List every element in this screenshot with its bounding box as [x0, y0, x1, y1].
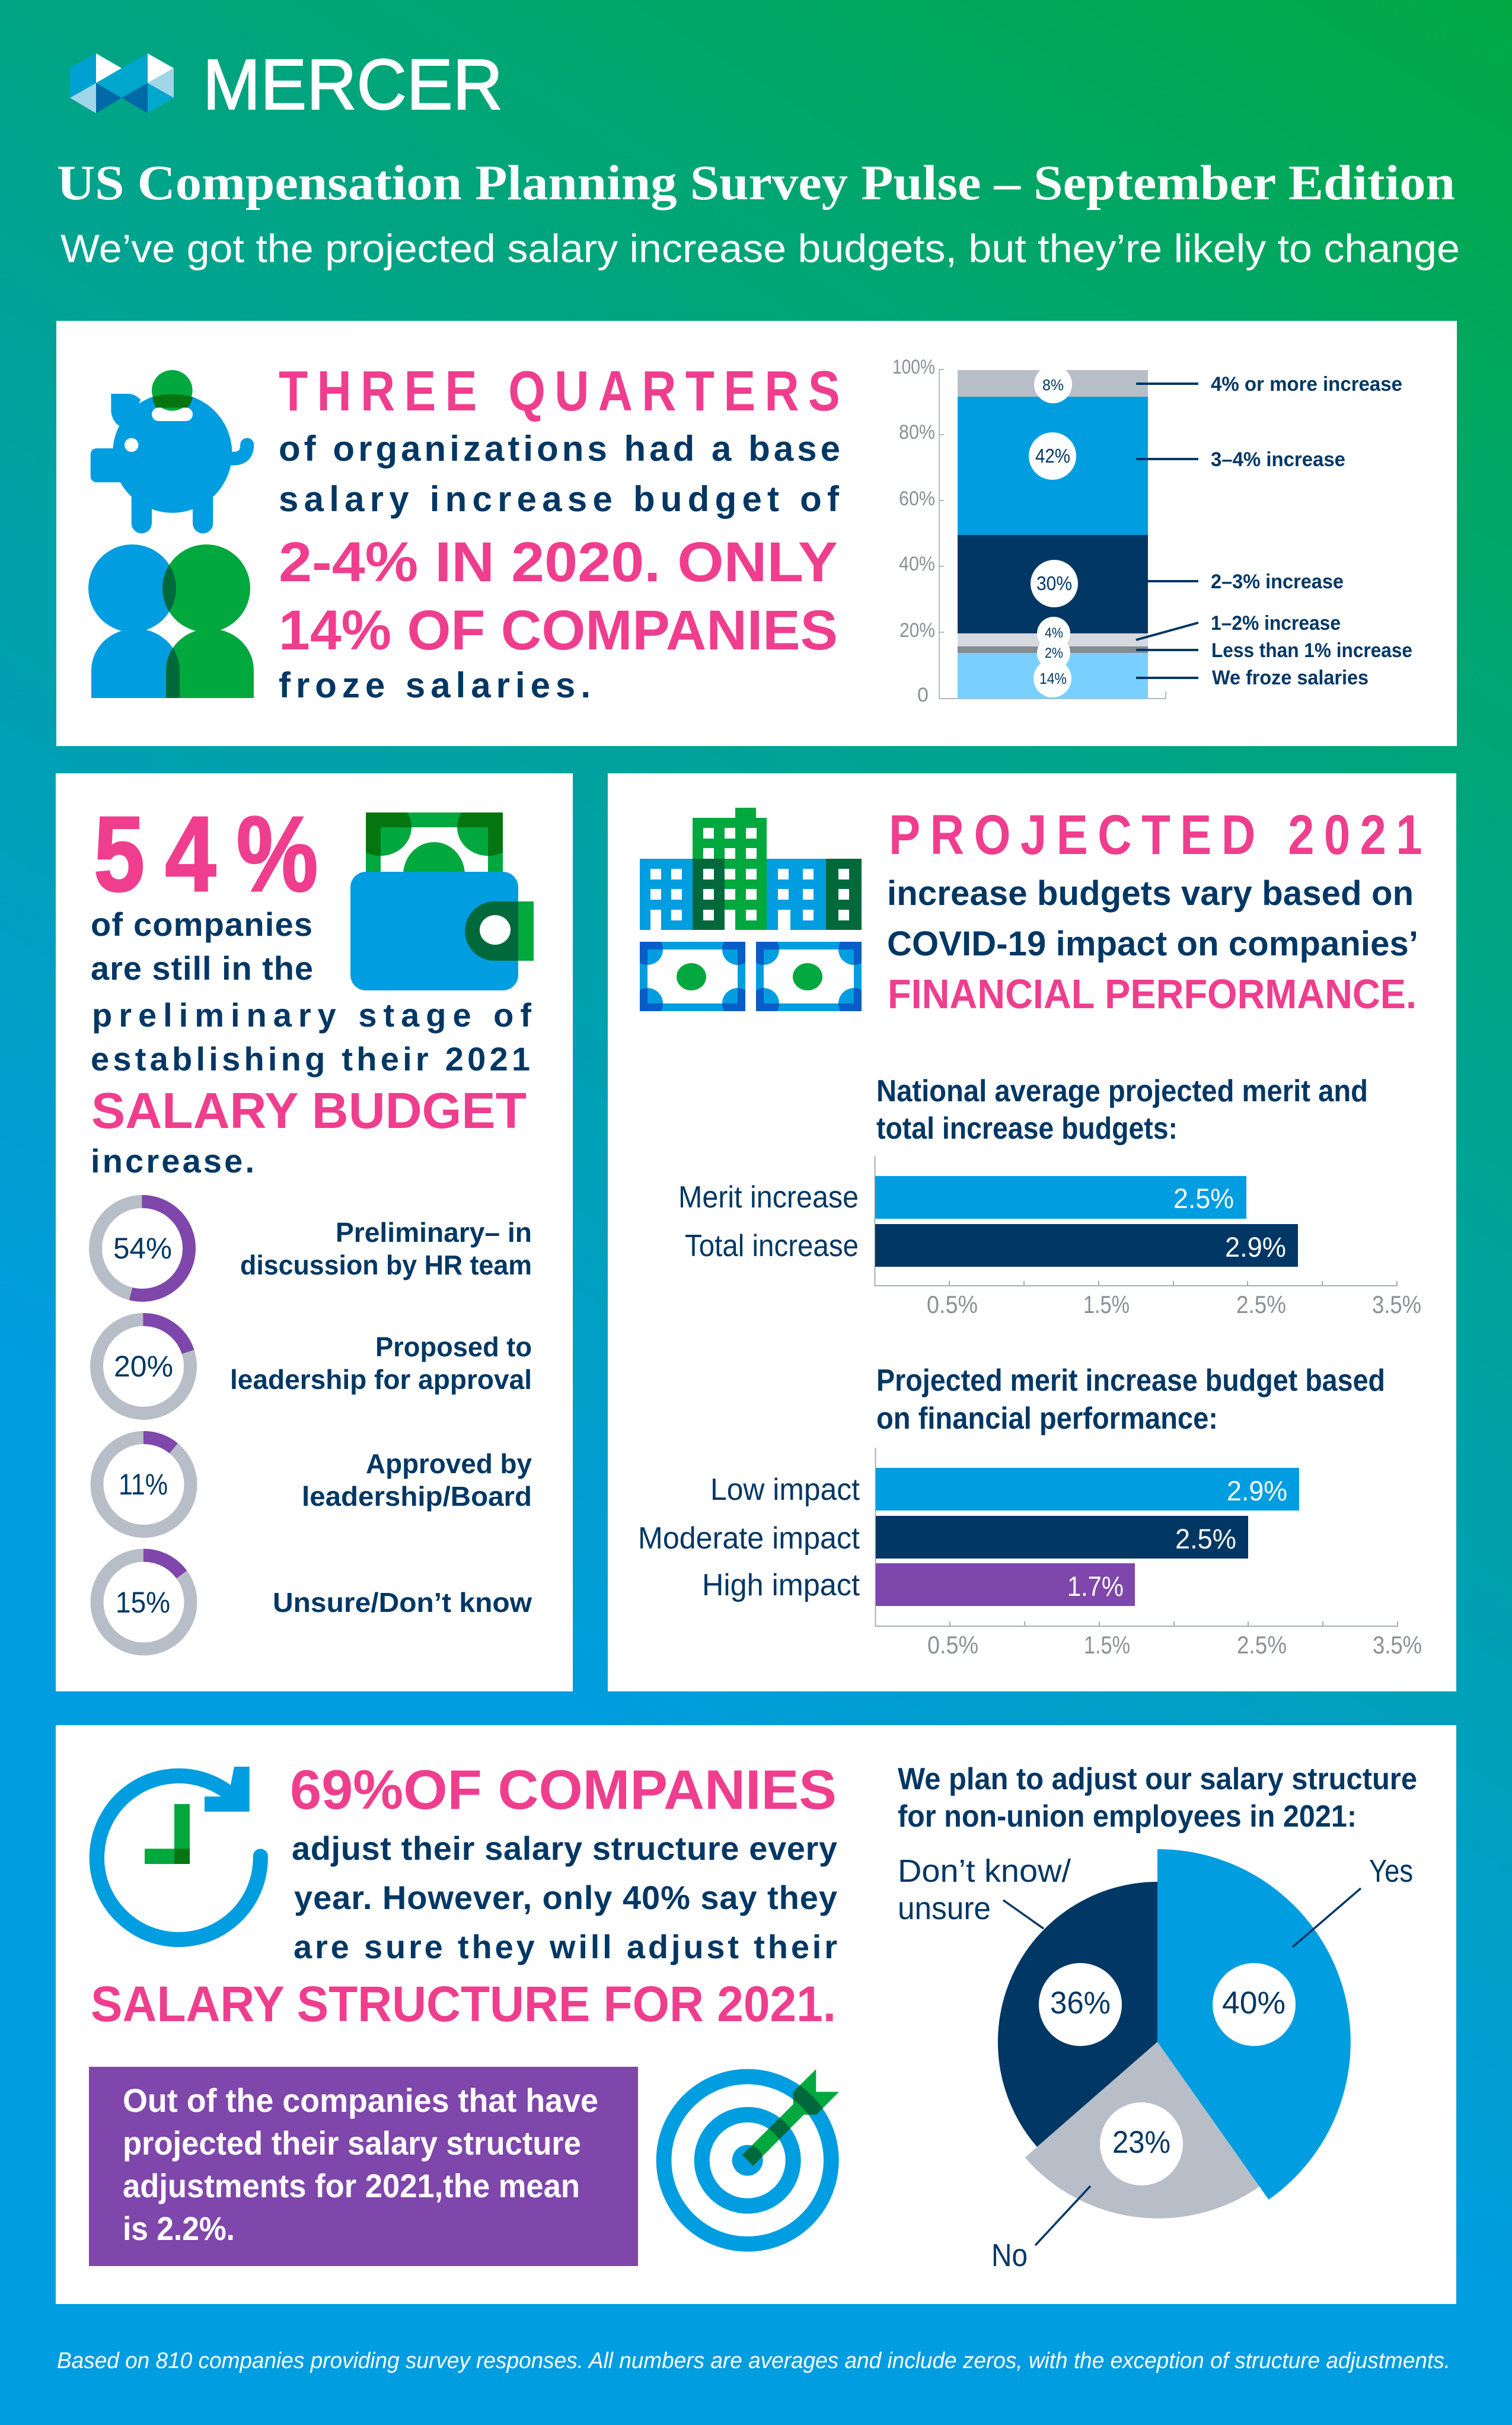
icon: wallet with banknote: [350, 799, 534, 990]
heading text: adjust their salary structure every: [292, 1830, 837, 1867]
heading text: increase.: [91, 1142, 254, 1180]
pie chart: [898, 1849, 1413, 2273]
stacked bar chart: 40%: [899, 553, 935, 575]
pie chart: 40%: [1222, 1986, 1285, 2021]
pie chart: Yes: [1369, 1853, 1413, 1889]
callout: mean adjustment: [89, 2067, 638, 2266]
label: preliminary: Preliminary– in: [336, 1217, 532, 1248]
stacked bar chart: 3–4% increase: [1211, 448, 1345, 471]
heading text: are still in the: [91, 949, 313, 987]
heading text: are sure they will adjust their: [294, 1928, 837, 1965]
pie chart: 36%: [1050, 1986, 1111, 2021]
bar chart: national average: 1.5%: [1083, 1290, 1130, 1318]
icon: piggy bank: [91, 370, 247, 533]
heading text: year. However, only 40% say they: [294, 1879, 837, 1916]
stacked bar chart: 4% or more increase: [1211, 373, 1402, 396]
donut: 20 percent proposed: 20%: [114, 1350, 173, 1383]
chart title: National average projected merit and: [876, 1074, 1368, 1108]
label: approved: [302, 1448, 532, 1512]
icon: office buildings: [640, 808, 862, 930]
label: unsure: Unsure/Don’t know: [273, 1587, 532, 1618]
donut: 11 percent approved: 11%: [119, 1468, 168, 1501]
stacked bar chart: 80%: [899, 421, 935, 444]
label: preliminary: [240, 1217, 532, 1280]
donut: 54 percent preliminary: [95, 1202, 189, 1295]
title: US Compensation Planning Survey Pulse – September Edition: [57, 155, 1455, 211]
stacked bar chart: Less than 1% increase: [1211, 639, 1412, 662]
heading text: [887, 803, 1422, 1017]
bar chart: financial performance: [638, 1363, 1422, 1659]
icon: target with arrow: [664, 2069, 839, 2244]
stacked bar chart: 0: [917, 684, 929, 706]
heading text: preliminary stage of: [92, 996, 531, 1034]
heading text: 69%OF COMPANIES: [290, 1758, 837, 1821]
logo: Mercer: [70, 44, 503, 125]
bar chart: financial performance: 1.7%: [1067, 1570, 1124, 1602]
stacked bar chart: 1–2% increase: [1211, 612, 1341, 635]
stacked bar chart: 2–3% increase: [1211, 571, 1344, 593]
panel: salary structure: [56, 1725, 1456, 2304]
icon: two people: [88, 544, 254, 698]
donut: 15 percent unsure: 15%: [116, 1586, 170, 1619]
pie chart: unsure: [898, 1891, 991, 1926]
subtitle: We’ve got the projected salary increase budgets, but they’re likely to change: [60, 227, 1460, 271]
panel: projected 2021: [608, 773, 1456, 1691]
chart title: for non-union employees in 2021:: [898, 1799, 1357, 1834]
stacked bar chart: 14%: [1039, 670, 1067, 687]
donut: 20 percent proposed: [97, 1320, 190, 1413]
heading text: FINANCIAL PERFORMANCE.: [888, 971, 1417, 1017]
stacked bar chart: [892, 356, 1412, 706]
bar chart: financial performance: 1.5%: [1084, 1631, 1130, 1659]
label: proposed: Proposed to: [375, 1331, 532, 1362]
chart title: on financial performance:: [876, 1401, 1218, 1436]
panel: three quarters: [56, 321, 1457, 746]
heading text: PROJECTED 2021: [889, 803, 1422, 866]
stacked bar chart: 2%: [1045, 645, 1063, 661]
callout: mean adjustment: adjustments for 2021,the mean: [123, 2167, 580, 2204]
stacked bar chart: 42%: [1035, 445, 1070, 467]
heading text: 2-4% IN 2020. ONLY: [279, 531, 838, 594]
heading text: COVID-19 impact on companies’: [887, 925, 1418, 963]
label: proposed: leadership for approval: [230, 1364, 532, 1395]
donut: 54 percent preliminary: 54%: [113, 1232, 172, 1265]
stacked bar chart: 20%: [899, 619, 935, 642]
bar chart: financial performance: Moderate impact: [638, 1521, 860, 1556]
donut: 11 percent approved: [97, 1438, 191, 1531]
bar chart: financial performance: High impact: [702, 1568, 860, 1602]
heading text: salary increase budget of: [279, 479, 840, 519]
pie chart: 23%: [1112, 2125, 1170, 2160]
bar chart: national average: [678, 1074, 1421, 1318]
heading text: froze salaries.: [279, 665, 591, 705]
bar chart: national average: Merit increase: [678, 1180, 859, 1215]
heading text: increase budgets vary based on: [887, 874, 1414, 913]
chart title: We plan to adjust our salary structure: [898, 1762, 1417, 1796]
heading text: 14% OF COMPANIES: [279, 599, 838, 662]
icon: Mercer hexagon mark: [70, 53, 174, 113]
bar chart: financial performance: Low impact: [710, 1473, 860, 1507]
label: proposed: [230, 1331, 532, 1395]
bar chart: financial performance: 0.5%: [927, 1631, 978, 1659]
callout: mean adjustment: projected their salary structure: [123, 2124, 581, 2162]
stacked bar chart: 30%: [1036, 572, 1072, 594]
icon: banknotes: [640, 942, 862, 1011]
bar chart: national average: 2.9%: [1225, 1231, 1286, 1263]
label: approved: Approved by: [366, 1448, 532, 1479]
chart title: total increase budgets:: [876, 1111, 1178, 1146]
chart title: [876, 1074, 1368, 1146]
bar chart: national average: 3.5%: [1372, 1290, 1421, 1318]
heading text: SALARY STRUCTURE FOR 2021.: [91, 1976, 836, 2032]
chart title: Projected merit increase budget based: [876, 1363, 1385, 1398]
heading text: of organizations had a base: [279, 429, 840, 469]
bar chart: national average: 0.5%: [927, 1290, 978, 1318]
pie chart: Don’t know/: [898, 1853, 1071, 1889]
pie chart: No: [991, 2238, 1028, 2273]
bar chart: financial performance: 2.9%: [1227, 1475, 1287, 1506]
heading text: of companies: [91, 906, 312, 943]
heading text: establishing their 2021: [91, 1040, 530, 1078]
bar chart: financial performance: 3.5%: [1373, 1631, 1422, 1659]
icon: clock with arrow: [97, 1767, 260, 1939]
bar chart: financial performance: 2.5%: [1237, 1631, 1287, 1659]
chart title: [898, 1762, 1417, 1834]
bar chart: national average: 2.5%: [1236, 1290, 1286, 1318]
panel: 54 percent: [56, 773, 573, 1691]
stacked bar chart: 60%: [899, 487, 935, 510]
stacked bar chart: 100%: [892, 356, 935, 378]
heading text: [91, 794, 531, 1180]
stacked bar chart: We froze salaries: [1212, 667, 1369, 689]
callout: mean adjustment: Out of the companies that have: [123, 2082, 598, 2119]
wordmark: MERCER: [203, 44, 503, 125]
bar chart: national average: 2.5%: [1173, 1183, 1234, 1214]
stacked bar chart: 8%: [1042, 376, 1064, 394]
donut: 15 percent unsure: [97, 1555, 191, 1649]
heading text: THREE QUARTERS: [279, 359, 840, 423]
heading text: [279, 359, 840, 705]
bar chart: financial performance: 2.5%: [1175, 1523, 1236, 1554]
chart title: [876, 1363, 1385, 1436]
bar chart: national average: Total increase: [685, 1229, 859, 1263]
callout: mean adjustment: is 2.2%.: [123, 2210, 235, 2247]
heading text: [91, 1758, 837, 2032]
heading text: 54%: [94, 794, 318, 914]
heading text: SALARY BUDGET: [91, 1083, 527, 1139]
footnote: Based on 810 companies providing survey responses. All numbers are averages and include zeros, with the exception of structure adjustments.: [57, 2348, 1450, 2373]
label: approved: leadership/Board: [302, 1481, 532, 1512]
label: preliminary: discussion by HR team: [240, 1250, 532, 1280]
stacked bar chart: 4%: [1045, 625, 1063, 641]
